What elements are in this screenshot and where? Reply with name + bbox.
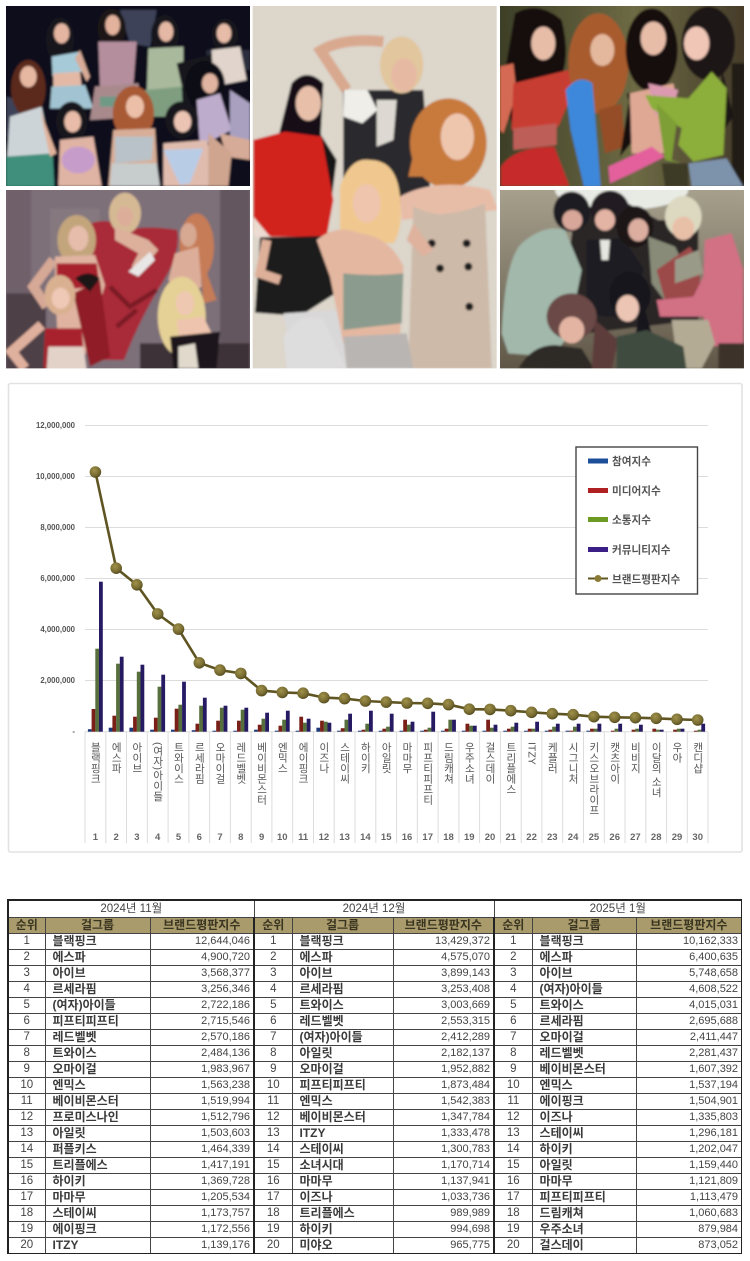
x axis group names: 에이핑크 bbox=[297, 742, 309, 784]
ranking table: three months: 미야오 bbox=[300, 1238, 333, 1252]
ranking table: three months: 9 bbox=[270, 1063, 276, 1075]
ranking table: three months: 1,139,176 bbox=[201, 1239, 250, 1251]
ranking table: three months: 18 bbox=[507, 1207, 520, 1219]
ranking table: three months: 2,484,136 bbox=[201, 1047, 250, 1059]
ranking table: three months: 걸그룹 bbox=[81, 918, 114, 932]
x axis rank numbers: 16 bbox=[402, 832, 412, 843]
ranking table: three months: 2025년 1월 bbox=[590, 902, 646, 914]
ranking table: three months: 994,698 bbox=[450, 1223, 490, 1235]
ranking table: three months: 블랙핑크 bbox=[52, 934, 97, 948]
ranking table: three months: 9 bbox=[24, 1063, 30, 1075]
ranking table: three months: 하이키 bbox=[52, 1174, 86, 1188]
ranking table: three months: 1,983,967 bbox=[201, 1063, 250, 1075]
ranking table: three months: 879,984 bbox=[698, 1223, 738, 1235]
ranking table: three months: (여자)아이들 bbox=[52, 998, 116, 1012]
chart gridlines bbox=[85, 426, 708, 843]
ranking table: three months: 5,748,658 bbox=[689, 967, 738, 979]
ranking table: three months: 1,347,784 bbox=[441, 1111, 490, 1123]
ranking table: three months: 965,775 bbox=[450, 1239, 490, 1251]
ranking table: three months: 17 bbox=[20, 1191, 33, 1203]
ranking table: three months: ITZY bbox=[300, 1126, 326, 1140]
ranking table: three months: 20 bbox=[507, 1239, 520, 1251]
ranking table: three months: 블랙핑크 bbox=[300, 934, 344, 948]
x axis rank numbers: 15 bbox=[381, 832, 392, 843]
ranking table: three months: 11 bbox=[267, 1095, 279, 1107]
ranking table: three months: 오마이걸 bbox=[540, 1030, 584, 1044]
ranking table: three months: 11 bbox=[21, 1095, 33, 1107]
ranking table: three months: 1,300,783 bbox=[441, 1143, 490, 1155]
ranking table: three months: 5 bbox=[270, 999, 276, 1011]
ranking table: three months: 16 bbox=[20, 1175, 33, 1187]
legend: community index: 커뮤니티지수 bbox=[612, 544, 671, 556]
ranking table: three months: 마마무 bbox=[540, 1174, 573, 1188]
ranking table: three months: 3 bbox=[270, 967, 276, 979]
ranking table: three months: 4,015,031 bbox=[689, 999, 738, 1011]
ranking table: three months: 3,253,408 bbox=[441, 983, 490, 995]
x axis group names: 케플러 bbox=[546, 742, 558, 774]
ranking table: three months: 3,256,346 bbox=[201, 983, 250, 995]
y axis labels: 12,000,000 bbox=[36, 421, 76, 430]
ranking table: three months: 4,608,522 bbox=[689, 983, 738, 995]
x axis rank numbers: 23 bbox=[547, 832, 558, 843]
legend: communication index bbox=[588, 514, 651, 526]
ranking table: three months: 이즈나 bbox=[300, 1190, 333, 1204]
ranking table: three months: 트와이스 bbox=[540, 998, 584, 1012]
legend: participation index bbox=[588, 455, 651, 468]
ranking table: three months: 1,205,534 bbox=[201, 1191, 250, 1203]
ranking table: three months: 15 bbox=[20, 1159, 33, 1171]
ranking table: three months: 10 bbox=[20, 1079, 33, 1091]
ranking table: three months: 엔믹스 bbox=[52, 1078, 86, 1092]
ranking table: three months: 17 bbox=[267, 1191, 280, 1203]
ranking table: three months: 1,121,809 bbox=[689, 1175, 738, 1187]
ranking table: three months: 트리플에스 bbox=[52, 1158, 108, 1172]
ranking table: three months: 걸그룹 bbox=[567, 918, 601, 932]
ranking table: three months: 12,644,046 bbox=[195, 935, 250, 947]
x axis group names: 에스파 bbox=[110, 742, 122, 774]
ranking table: three months bbox=[7, 899, 742, 1254]
ranking table: three months: 1,170,714 bbox=[441, 1159, 490, 1171]
ranking table: three months: 18 bbox=[20, 1207, 33, 1219]
ranking table: three months: 1,504,901 bbox=[689, 1095, 738, 1107]
ranking table: three months: 스테이씨 bbox=[52, 1206, 97, 1220]
ranking table: three months: 2024년 12월 bbox=[343, 902, 405, 914]
ranking table: three months: 11 bbox=[507, 1095, 519, 1107]
ranking table: three months: 4,575,070 bbox=[441, 951, 490, 963]
x axis group names: 우아 bbox=[671, 742, 683, 764]
ranking table: three months: 13,429,372 bbox=[435, 935, 490, 947]
x axis group names: ITZY bbox=[526, 742, 538, 765]
ranking table: three months: 13 bbox=[20, 1127, 33, 1139]
ranking table: three months: 걸스데이 bbox=[540, 1238, 584, 1252]
ranking table: three months: (여자)아이들 bbox=[540, 982, 603, 996]
ranking table: three months: 2,281,437 bbox=[689, 1047, 738, 1059]
ranking table: three months: 2,182,137 bbox=[441, 1047, 490, 1059]
x axis group names: 시그니처 bbox=[567, 742, 579, 785]
x axis rank numbers: 6 bbox=[197, 832, 202, 843]
x axis group names: 캔디샵 bbox=[692, 742, 704, 774]
ranking table: three months: 트와이스 bbox=[300, 998, 344, 1012]
y axis labels: 10,000,000 bbox=[36, 472, 76, 481]
x axis group names: 아이브 bbox=[131, 742, 143, 774]
ranking table: three months: 피프티피프티 bbox=[300, 1078, 366, 1092]
x axis group names: 스테이씨 bbox=[339, 742, 351, 784]
ranking table: three months: 1,417,191 bbox=[201, 1159, 250, 1171]
x axis group names: 레드벨벳 bbox=[235, 742, 247, 785]
photo: six-member group with coats bbox=[500, 190, 744, 368]
ranking table: three months: (여자)아이들 bbox=[300, 1030, 363, 1044]
ranking table: three months: 3 bbox=[510, 967, 516, 979]
ranking table: three months: 1 bbox=[24, 935, 30, 947]
y axis labels: 6,000,000 bbox=[40, 574, 76, 583]
ranking table: three months: 피프티피프티 bbox=[52, 1014, 119, 1028]
y axis labels: 2,000,000 bbox=[40, 676, 76, 685]
x axis group names: 우주소녀 bbox=[463, 742, 475, 785]
x axis rank numbers: 27 bbox=[630, 832, 641, 843]
ranking table: three months: 20 bbox=[20, 1239, 33, 1251]
ranking table: three months: 베이비몬스터 bbox=[300, 1110, 366, 1124]
ranking table: three months: 하이키 bbox=[540, 1142, 573, 1156]
ranking table: three months: 1,296,181 bbox=[689, 1127, 738, 1139]
ranking table: three months: 드림캐쳐 bbox=[540, 1206, 584, 1220]
ranking table: three months: 프로미스나인 bbox=[52, 1110, 119, 1124]
x axis group names: 블랙핑크 bbox=[89, 742, 101, 784]
ranking table: three months: 우주소녀 bbox=[540, 1222, 584, 1236]
ranking table: three months: 14 bbox=[20, 1143, 33, 1155]
ranking table: three months: 레드벨벳 bbox=[52, 1030, 97, 1044]
ranking table: three months: 3,899,143 bbox=[441, 967, 490, 979]
ranking table: three months: 하이키 bbox=[300, 1222, 333, 1236]
x axis group names: 베이비몬스터 bbox=[256, 742, 268, 806]
ranking table: three months: 1,464,339 bbox=[201, 1143, 250, 1155]
ranking table: three months: 순위 bbox=[502, 918, 524, 932]
ranking table: three months: 오마이걸 bbox=[300, 1062, 344, 1076]
ranking table: three months: 베이비몬스터 bbox=[540, 1062, 606, 1076]
ranking table: three months: 에스파 bbox=[52, 950, 86, 964]
x axis group names: 키스오브라이프 bbox=[588, 742, 600, 816]
ranking table: three months: 트와이스 bbox=[52, 1046, 97, 1060]
ranking table: three months: 에이핑크 bbox=[52, 1222, 97, 1236]
ranking table: three months: 14 bbox=[507, 1143, 520, 1155]
ranking table: three months: 브랜드평판지수 bbox=[163, 918, 240, 932]
ranking table: three months: 마마무 bbox=[300, 1174, 333, 1188]
photo: nine-member group in mermaid outfits bbox=[3, 3, 253, 190]
ranking table: three months: 10 bbox=[267, 1079, 280, 1091]
ranking table: three months: 10 bbox=[507, 1079, 520, 1091]
ranking table: three months: 순위 bbox=[262, 918, 284, 932]
ranking table: three months: 15 bbox=[507, 1159, 520, 1171]
ranking table: three months: 3 bbox=[24, 967, 30, 979]
ranking table: three months: 9 bbox=[510, 1063, 516, 1075]
ranking table: three months: 20 bbox=[267, 1239, 280, 1251]
ranking table: three months: 1,172,556 bbox=[201, 1223, 250, 1235]
ranking table: three months: 1,952,882 bbox=[441, 1063, 490, 1075]
ranking table: three months: 피프티피프티 bbox=[540, 1190, 606, 1204]
photo: four-member group in beige studio bbox=[250, 3, 500, 370]
legend: media index: 미디어지수 bbox=[612, 484, 661, 498]
photo: five-member group with red heart bbox=[3, 187, 253, 372]
ranking table: three months: 1 bbox=[270, 935, 276, 947]
ranking table: three months: 7 bbox=[510, 1031, 516, 1043]
x axis rank numbers: 4 bbox=[155, 832, 161, 843]
x axis group names: 마마무 bbox=[401, 742, 413, 774]
ranking table: three months: 순위 bbox=[16, 918, 38, 932]
x axis rank numbers: 14 bbox=[360, 832, 371, 843]
y axis labels: 8,000,000 bbox=[40, 523, 76, 532]
x axis rank numbers: 13 bbox=[339, 832, 350, 843]
x axis group names: 드림캐쳐 bbox=[442, 742, 454, 785]
x axis group names: 피프티피프티 bbox=[422, 742, 434, 806]
ranking table: three months: 에스파 bbox=[540, 950, 573, 964]
x axis rank numbers: 20 bbox=[485, 832, 495, 843]
ranking table: three months: 브랜드평판지수 bbox=[650, 918, 727, 932]
ranking table: three months: 블랙핑크 bbox=[540, 934, 584, 948]
ranking table: three months: 1,519,994 bbox=[201, 1095, 250, 1107]
ranking table: three months: 4 bbox=[510, 983, 516, 995]
ranking table: three months: 아일릿 bbox=[300, 1046, 333, 1060]
line markers bbox=[90, 466, 704, 726]
ranking table: three months: 3,568,377 bbox=[201, 967, 250, 979]
ranking table: three months: 2,411,447 bbox=[690, 1031, 738, 1043]
legend bbox=[576, 447, 698, 594]
ranking table: three months: 10,162,333 bbox=[683, 935, 738, 947]
x axis group names: 르세라핌 bbox=[193, 742, 205, 784]
ranking table: three months: 873,052 bbox=[698, 1239, 738, 1251]
ranking table: three months: 19 bbox=[267, 1223, 280, 1235]
ranking table: three months: 6 bbox=[24, 1015, 30, 1027]
ranking table: three months: 오마이걸 bbox=[52, 1062, 97, 1076]
ranking table: three months: 4 bbox=[24, 983, 30, 995]
ranking table: three months: 트리플에스 bbox=[300, 1206, 355, 1220]
ranking table: three months: 16 bbox=[267, 1175, 280, 1187]
ranking table: three months: 1,335,803 bbox=[689, 1111, 738, 1123]
x axis rank numbers: 11 bbox=[298, 832, 309, 843]
y axis labels: - bbox=[72, 727, 75, 736]
ranking table: three months: 1,137,941 bbox=[441, 1175, 490, 1187]
ranking table: three months: 4 bbox=[270, 983, 276, 995]
ranking table: three months: 1,173,757 bbox=[201, 1207, 250, 1219]
ranking table: three months: 스테이씨 bbox=[540, 1126, 584, 1140]
chart: brand reputation bars and line bbox=[36, 421, 708, 843]
ranking table: three months: 1,159,440 bbox=[689, 1159, 738, 1171]
x axis group names: 걸스데이 bbox=[484, 741, 496, 785]
ranking table: three months: 2,553,315 bbox=[441, 1015, 490, 1027]
ranking table: three months: 1,542,383 bbox=[441, 1095, 490, 1107]
x axis rank numbers: 29 bbox=[672, 832, 682, 843]
legend: communication index: 소통지수 bbox=[612, 514, 651, 526]
ranking table: three months: 12 bbox=[20, 1111, 33, 1123]
y axis labels: 4,000,000 bbox=[40, 625, 76, 634]
ranking table: three months: 아일릿 bbox=[52, 1126, 86, 1140]
ranking table: three months: 1,202,047 bbox=[689, 1143, 738, 1155]
ranking table: three months: 1,333,478 bbox=[441, 1127, 490, 1139]
ranking table: three months: 2 bbox=[24, 951, 30, 963]
x axis group names: 아일릿 bbox=[380, 742, 392, 774]
ranking table: three months: 18 bbox=[267, 1207, 280, 1219]
ranking table: three months: 2024년 11월 bbox=[100, 902, 162, 914]
ranking table: three months: 아이브 bbox=[52, 966, 86, 980]
ranking table: three months: 13 bbox=[507, 1127, 520, 1139]
x axis rank numbers: 24 bbox=[568, 832, 579, 843]
ranking table: three months: 1,503,603 bbox=[201, 1127, 250, 1139]
legend: participation index: 참여지수 bbox=[612, 455, 651, 468]
x axis rank numbers: 30 bbox=[692, 832, 703, 843]
ranking table: three months: 12 bbox=[267, 1111, 280, 1123]
ranking table: three months: 아이브 bbox=[300, 966, 333, 980]
x axis rank numbers: 26 bbox=[609, 832, 620, 843]
ranking table: three months: 7 bbox=[24, 1031, 30, 1043]
ranking table: three months: 르세라핌 bbox=[52, 982, 97, 996]
ranking table: three months: 2,715,546 bbox=[201, 1015, 250, 1027]
x axis rank numbers: 25 bbox=[589, 832, 600, 843]
x axis rank numbers: 1 bbox=[93, 832, 99, 843]
ranking table: three months: 6,400,635 bbox=[689, 951, 738, 963]
x axis rank numbers: 22 bbox=[526, 832, 537, 843]
x axis rank numbers bbox=[93, 832, 703, 843]
ranking table: three months: 2,695,688 bbox=[689, 1015, 738, 1027]
ranking table: three months: ITZY bbox=[52, 1238, 78, 1252]
ranking table: three months: 에이핑크 bbox=[540, 1094, 584, 1108]
ranking table: three months: 2,570,186 bbox=[201, 1031, 250, 1043]
x axis group names: 엔믹스 bbox=[276, 742, 288, 774]
ranking table: three months: 에스파 bbox=[300, 950, 333, 964]
x axis rank numbers: 8 bbox=[238, 832, 243, 843]
ranking table: three months: 레드벨벳 bbox=[540, 1046, 584, 1060]
ranking table: three months: 1,873,484 bbox=[441, 1079, 490, 1091]
ranking table: three months: 5 bbox=[510, 999, 516, 1011]
ranking table: three months: 8 bbox=[510, 1047, 516, 1059]
ranking table: three months: 6 bbox=[270, 1015, 276, 1027]
x axis group names: 트리플에스 bbox=[505, 742, 517, 794]
ranking table: three months: 4,900,720 bbox=[201, 951, 250, 963]
y axis labels bbox=[36, 421, 76, 736]
x axis group names: 비비지 bbox=[629, 742, 641, 774]
x axis rank numbers: 10 bbox=[277, 832, 288, 843]
ranking table: three months: 1,113,479 bbox=[690, 1191, 738, 1203]
index bars bbox=[88, 582, 705, 732]
ranking table: three months: 퍼플키스 bbox=[52, 1142, 97, 1156]
ranking table: three months: 아이브 bbox=[540, 966, 573, 980]
x axis group names: 이즈나 bbox=[318, 742, 330, 774]
ranking table: three months: 베이비몬스터 bbox=[52, 1094, 119, 1108]
ranking table: three months: 19 bbox=[507, 1223, 520, 1235]
x axis group names bbox=[89, 741, 704, 816]
ranking table: three months: 2,412,289 bbox=[441, 1031, 490, 1043]
x axis rank numbers: 28 bbox=[651, 832, 661, 843]
ranking table: three months: 1,512,796 bbox=[201, 1111, 250, 1123]
ranking table: three months: 17 bbox=[507, 1191, 520, 1203]
ranking table: three months: 5 bbox=[24, 999, 30, 1011]
x axis rank numbers: 3 bbox=[134, 832, 140, 843]
ranking table: three months: 아일릿 bbox=[540, 1158, 573, 1172]
x axis group names: (여자)아이들 bbox=[152, 742, 164, 802]
ranking table: three months: 엔믹스 bbox=[540, 1078, 573, 1092]
x axis group names: 하이키 bbox=[359, 741, 371, 774]
ranking table: three months: 르세라핌 bbox=[540, 1014, 584, 1028]
ranking table: three months: 레드벨벳 bbox=[300, 1014, 344, 1028]
ranking table: three months: 스테이씨 bbox=[300, 1142, 344, 1156]
x axis rank numbers: 7 bbox=[217, 832, 223, 843]
x axis rank numbers: 17 bbox=[422, 832, 433, 843]
legend: media index bbox=[588, 484, 661, 498]
legend: brand reputation index: 브랜드평판지수 bbox=[612, 574, 680, 586]
ranking table: three months: 2 bbox=[270, 951, 276, 963]
ranking table: three months: 7 bbox=[270, 1031, 276, 1043]
x axis group names: 오마이걸 bbox=[214, 742, 226, 784]
ranking table: three months: 2,722,186 bbox=[201, 999, 250, 1011]
x axis group names: 트와이스 bbox=[172, 742, 184, 784]
x axis rank numbers: 21 bbox=[506, 832, 517, 843]
ranking table: three months: 13 bbox=[267, 1127, 280, 1139]
ranking table: three months: 1,607,392 bbox=[689, 1063, 738, 1075]
x axis rank numbers: 12 bbox=[319, 832, 329, 843]
ranking table: three months: 989,989 bbox=[450, 1207, 490, 1219]
x axis group names: 이달의 소녀 bbox=[650, 742, 662, 798]
ranking table: three months: 8 bbox=[270, 1047, 276, 1059]
ranking table: three months: 2 bbox=[510, 951, 516, 963]
ranking table: three months: 1,369,728 bbox=[201, 1175, 250, 1187]
ranking table: three months: 브랜드평판지수 bbox=[405, 918, 482, 932]
ranking table: three months: 마마무 bbox=[52, 1190, 86, 1204]
ranking table: three months: 걸그룹 bbox=[326, 918, 359, 932]
ranking table: three months: 르세라핌 bbox=[300, 982, 344, 996]
x axis rank numbers: 9 bbox=[259, 832, 264, 843]
x axis group names: 캣츠아이 bbox=[609, 742, 621, 785]
panel: chart frame bbox=[8, 384, 742, 852]
ranking table: three months: 15 bbox=[267, 1159, 280, 1171]
ranking table: three months: 1,033,736 bbox=[441, 1191, 490, 1203]
ranking table: three months: 8 bbox=[24, 1047, 30, 1059]
ranking table: three months: 6 bbox=[510, 1015, 516, 1027]
ranking table: three months: 1,563,238 bbox=[201, 1079, 250, 1091]
ranking table: three months: 19 bbox=[20, 1223, 33, 1235]
ranking table: three months: 16 bbox=[507, 1175, 520, 1187]
ranking table: three months: 엔믹스 bbox=[300, 1094, 333, 1108]
ranking table: three months: 소녀시대 bbox=[300, 1158, 344, 1172]
ranking table: three months: 이즈나 bbox=[540, 1110, 573, 1124]
x axis rank numbers: 5 bbox=[176, 832, 182, 843]
ranking table: three months: 14 bbox=[267, 1143, 280, 1155]
ranking table: three months: 3,003,669 bbox=[441, 999, 490, 1011]
x axis rank numbers: 18 bbox=[443, 832, 454, 843]
photo: four-member group in colourful outfits bbox=[497, 3, 747, 190]
brand reputation line bbox=[95, 472, 698, 720]
x axis rank numbers: 19 bbox=[464, 832, 475, 843]
ranking table: three months: 1 bbox=[510, 935, 516, 947]
ranking table: three months: 1,537,194 bbox=[689, 1079, 738, 1091]
ranking table: three months: 12 bbox=[507, 1111, 520, 1123]
ranking table: three months: 1,060,683 bbox=[689, 1207, 738, 1219]
x axis rank numbers: 2 bbox=[114, 832, 119, 843]
